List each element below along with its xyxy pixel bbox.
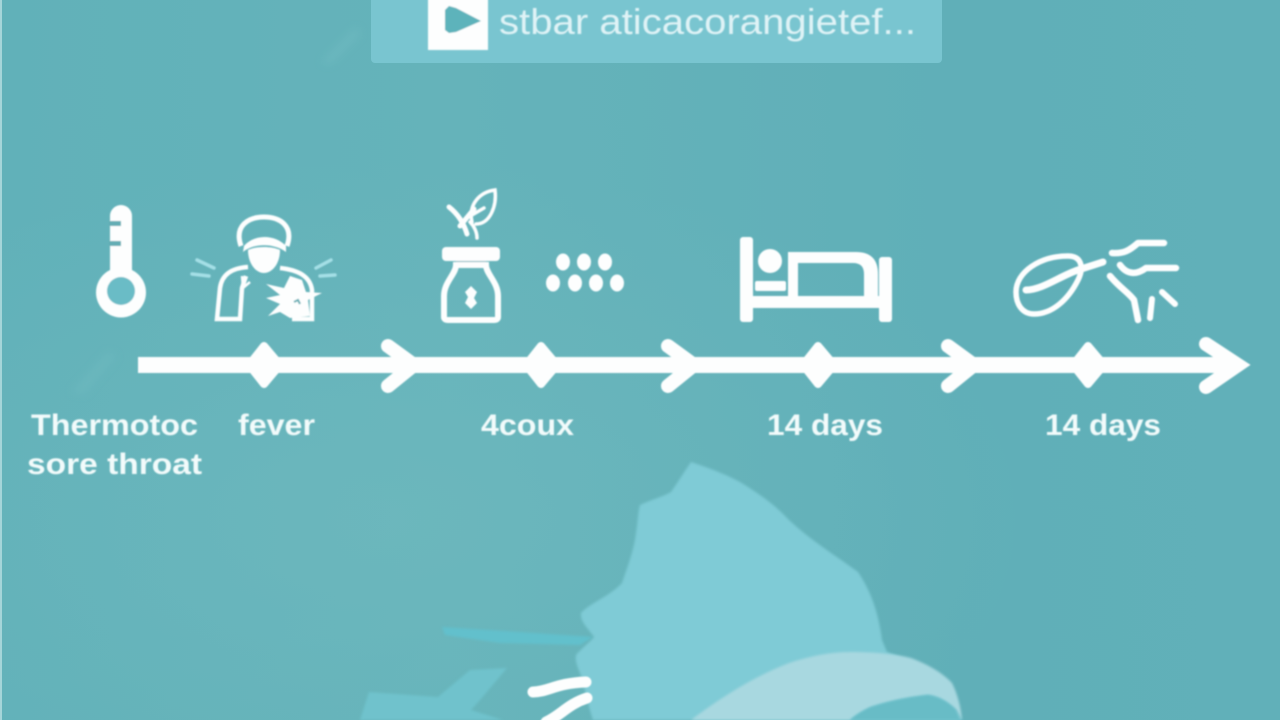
label: 14 days second: 14 days [1045,409,1161,442]
icon: person with sore throat [192,217,335,319]
collar inner shade [850,695,960,720]
figure collar [691,652,962,720]
arrowheads [388,344,1238,387]
figure silhouette [576,462,962,720]
timeline arrow [138,344,1238,387]
icon: thermometer [96,205,146,317]
icon: droplets [546,254,624,292]
white droplet strokes [533,682,587,720]
timeline labels [27,409,1161,481]
title text: stbar aticacorangietef... [499,1,916,42]
leaf [449,190,495,238]
hand [360,668,507,720]
milestone markers [249,346,1104,384]
title banner [371,0,942,63]
icon: spray [1016,243,1176,320]
breath streak [442,627,593,645]
icon: jar with leaf [442,190,500,320]
icon: play button [428,0,488,50]
label: fever: fever [238,409,315,442]
label: 14 days first: 14 days [767,409,883,442]
label: sore throat: sore throat [27,448,202,481]
illustration: hooded figure [360,462,962,720]
label: thermometer: Thermotoc [31,409,198,442]
label: cough: 4coux [481,409,574,442]
icon: bed [740,237,892,322]
